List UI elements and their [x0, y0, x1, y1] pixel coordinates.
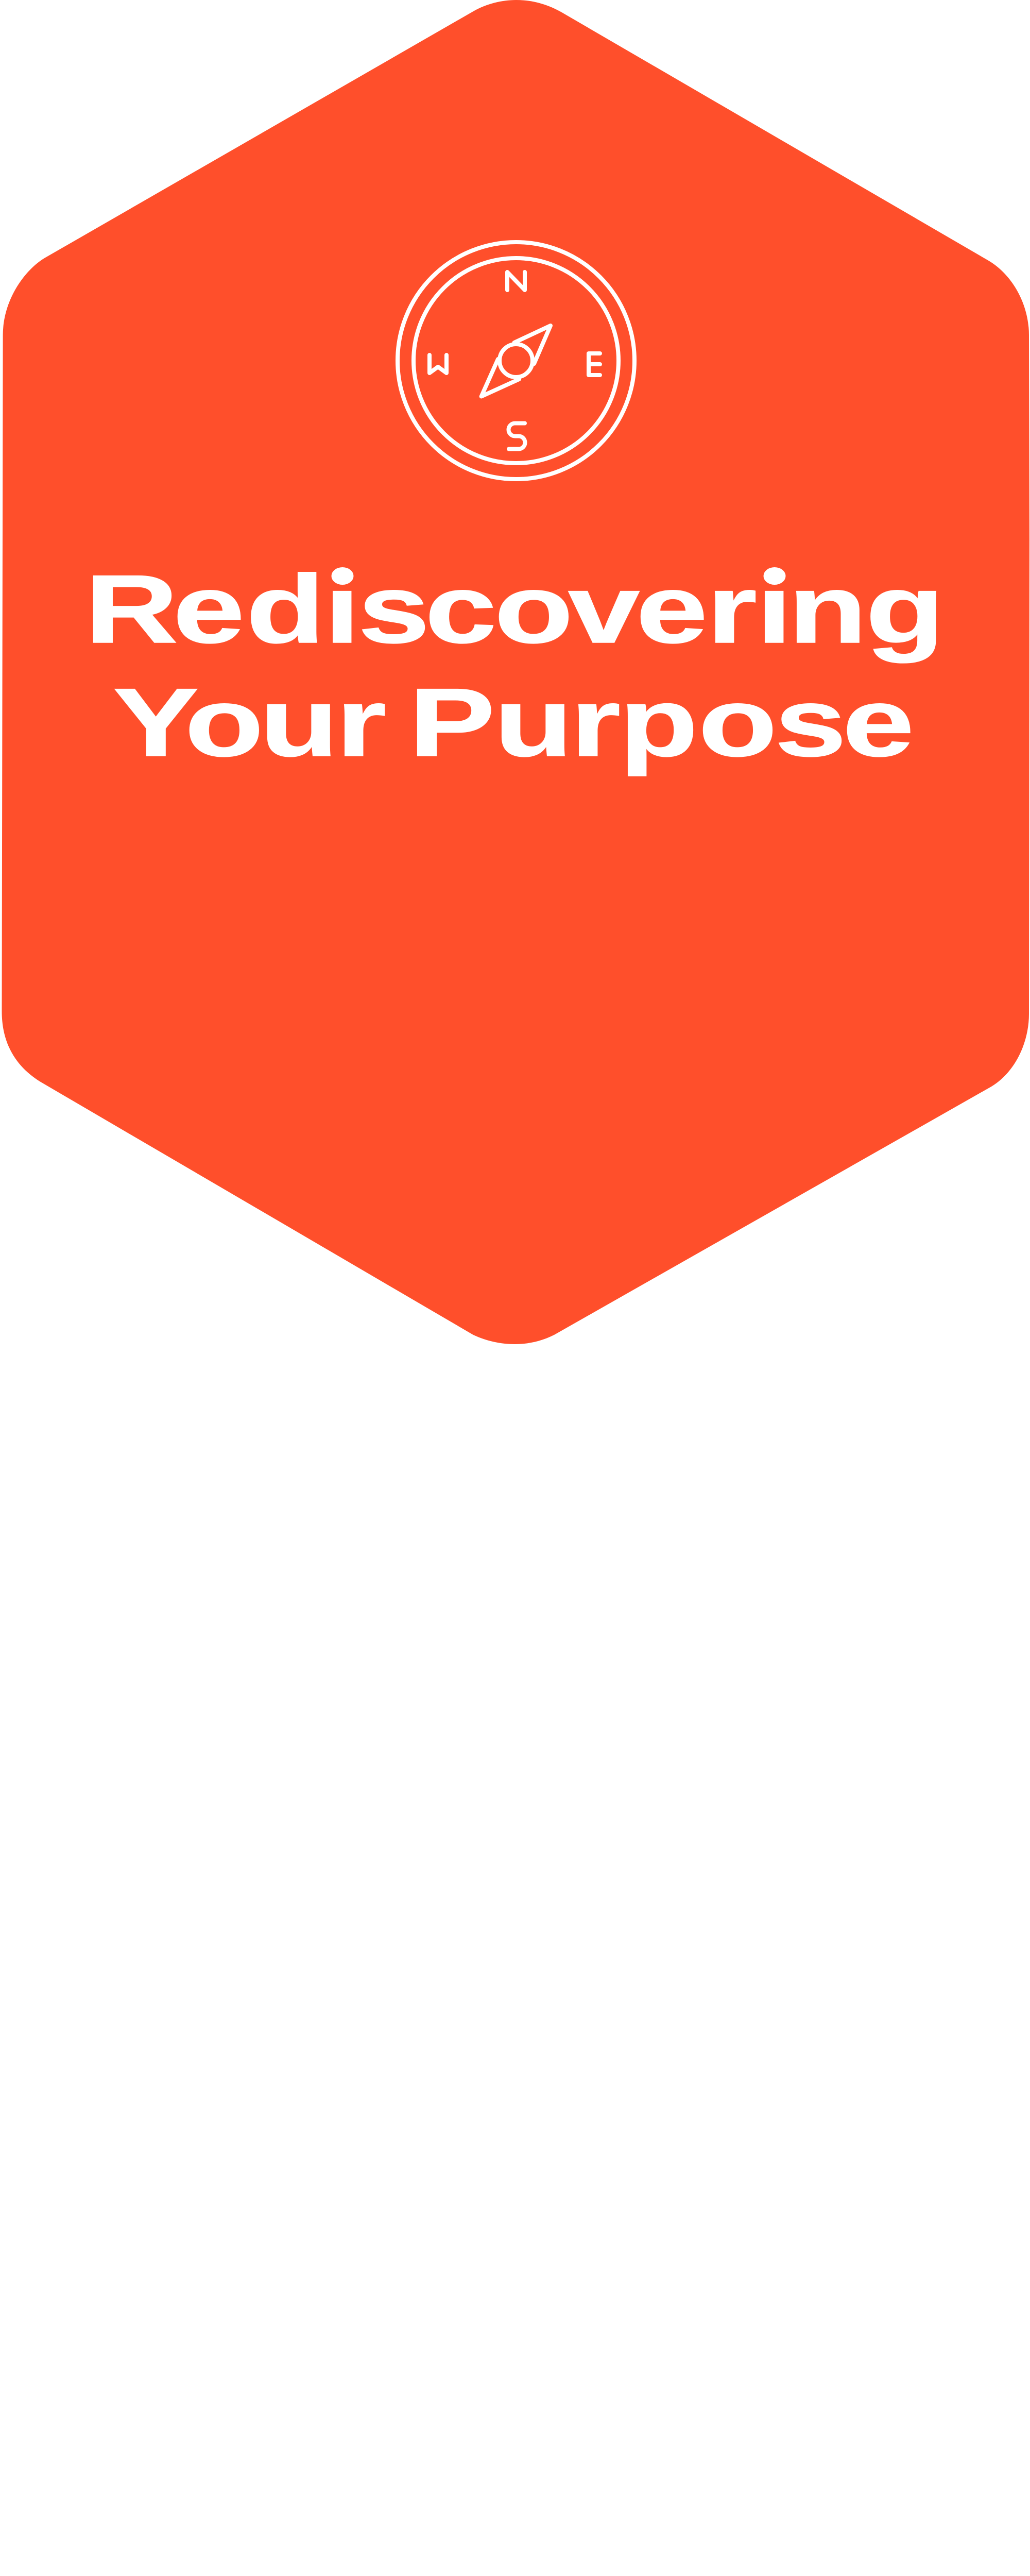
compass letter W — [430, 355, 447, 373]
compass needle hub — [500, 344, 533, 377]
compass letter S — [509, 423, 525, 449]
compass needle — [482, 326, 551, 397]
icon: compass — [398, 242, 634, 479]
rounded i-dots — [329, 567, 789, 588]
compass outer ring — [398, 242, 634, 479]
title — [85, 555, 945, 776]
title line 2: Your Purpose — [113, 668, 914, 776]
panel: orange hexagon header — [2, 0, 1029, 1344]
compass letter N — [507, 272, 525, 290]
compass inner ring — [414, 258, 619, 463]
title line 1: Rediscovering — [85, 555, 945, 663]
compass letter E — [589, 353, 600, 375]
